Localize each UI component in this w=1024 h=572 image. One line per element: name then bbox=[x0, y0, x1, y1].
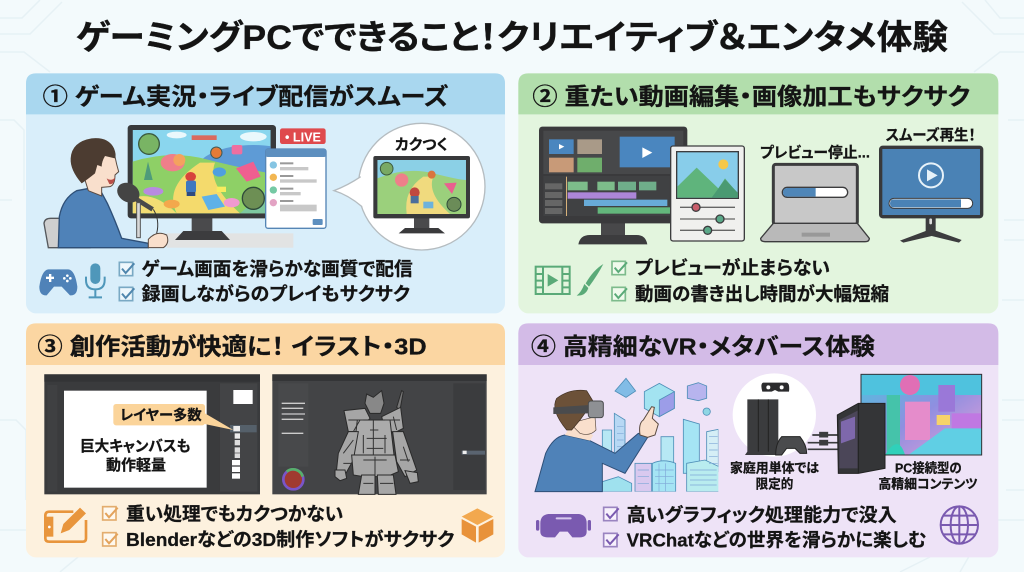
console comparison: 家庭用単体では bbox=[730, 461, 819, 476]
console comparison bbox=[730, 373, 819, 491]
panel: game streaming bbox=[26, 73, 505, 313]
desk bbox=[167, 233, 293, 248]
callout: many layers: レイヤー多数 bbox=[120, 406, 202, 424]
caption: huge canvas: 巨大キャンバスも bbox=[80, 437, 191, 455]
caption: huge canvas: 動作軽量 bbox=[106, 456, 166, 474]
bullet list bbox=[119, 259, 413, 305]
panel header: creative work bbox=[26, 323, 505, 365]
icon: globe bbox=[941, 506, 978, 544]
image: high-definition virtual world bbox=[861, 374, 982, 491]
illustration: metaverse city bbox=[602, 378, 719, 492]
image: high-definition virtual world: PC接続型の bbox=[895, 461, 962, 476]
bullet list: 録画しながらのプレイもサクサク bbox=[142, 284, 410, 305]
callout: many layers bbox=[113, 404, 233, 430]
bullet list bbox=[103, 504, 454, 550]
bullet list: Blenderなどの3D制作ソフトがサクサク bbox=[126, 529, 454, 550]
icon: VR headset bbox=[536, 514, 591, 537]
panel header: game streaming: ① ゲーム実況・ライブ配信がスムーズ bbox=[43, 83, 448, 110]
panel: VR and metaverse bbox=[518, 323, 998, 557]
monitor: smooth playback: スムーズ再生！ bbox=[886, 126, 976, 144]
microphone bbox=[114, 179, 158, 238]
image: high-definition virtual world: 高精細コンテンツ bbox=[878, 476, 978, 491]
panel header: creative work: ③ 創作活動が快適に！ イラスト・3D bbox=[37, 333, 427, 360]
bullet list: プレビューが止まらない bbox=[635, 257, 830, 278]
icon: film strip bbox=[536, 267, 570, 294]
bullet list: 動画の書き出し時間が大幅短縮 bbox=[635, 284, 889, 305]
icon: pen tablet bbox=[45, 508, 86, 542]
bullet list: 重い処理でもカクつかない bbox=[126, 504, 343, 525]
icon: gamepad bbox=[39, 269, 77, 295]
gaming PC tower bbox=[837, 403, 885, 473]
VR user person bbox=[535, 390, 658, 492]
icon: microphone bbox=[86, 263, 105, 297]
bullet list: VRChatなどの世界を滑らかに楽しむ bbox=[627, 530, 927, 551]
panel header: VR and metaverse bbox=[518, 323, 998, 365]
monitor: smooth playback bbox=[881, 126, 982, 243]
console comparison: 限定的 bbox=[756, 476, 793, 491]
screenshot: illustration app bbox=[44, 374, 260, 494]
panel header: video editing: ② 重たい動画編集・画像加工もサクサク bbox=[532, 84, 970, 110]
gaming monitor bbox=[128, 125, 276, 240]
streamer person bbox=[44, 138, 168, 248]
panel header: video editing bbox=[518, 73, 998, 114]
icon: paint brush bbox=[577, 264, 603, 296]
panel: creative work bbox=[26, 323, 505, 557]
live badge bbox=[280, 128, 326, 144]
panel header: VR and metaverse: ④ 高精細なVR・メタバース体験 bbox=[531, 334, 875, 360]
laptop: preview stopped: プレビュー停止... bbox=[760, 143, 870, 161]
laptop: preview stopped bbox=[760, 143, 870, 242]
icon: 3D cube bbox=[462, 508, 493, 543]
speech bubble: stutter bbox=[334, 123, 485, 250]
bullet list: 高いグラフィック処理能力で没入 bbox=[627, 504, 897, 525]
caption: huge canvas bbox=[80, 437, 191, 474]
editing monitor bbox=[539, 127, 687, 244]
title: ゲーミングPCでできること！クリエイティブ＆エンタメ体験 bbox=[76, 18, 948, 57]
bullet list bbox=[612, 257, 889, 305]
screenshot: 3D robot model bbox=[272, 374, 487, 494]
live badge: • LIVE bbox=[285, 130, 321, 144]
cables bbox=[808, 433, 838, 449]
panel header: game streaming bbox=[26, 73, 505, 114]
bullet list bbox=[604, 504, 927, 551]
panel: video editing bbox=[518, 73, 998, 313]
speech bubble: stutter: カクつく bbox=[395, 136, 448, 153]
chat window bbox=[266, 149, 326, 228]
image adjustment card bbox=[671, 146, 744, 241]
bullet list: ゲーム画面を滑らかな画質で配信 bbox=[141, 259, 413, 280]
